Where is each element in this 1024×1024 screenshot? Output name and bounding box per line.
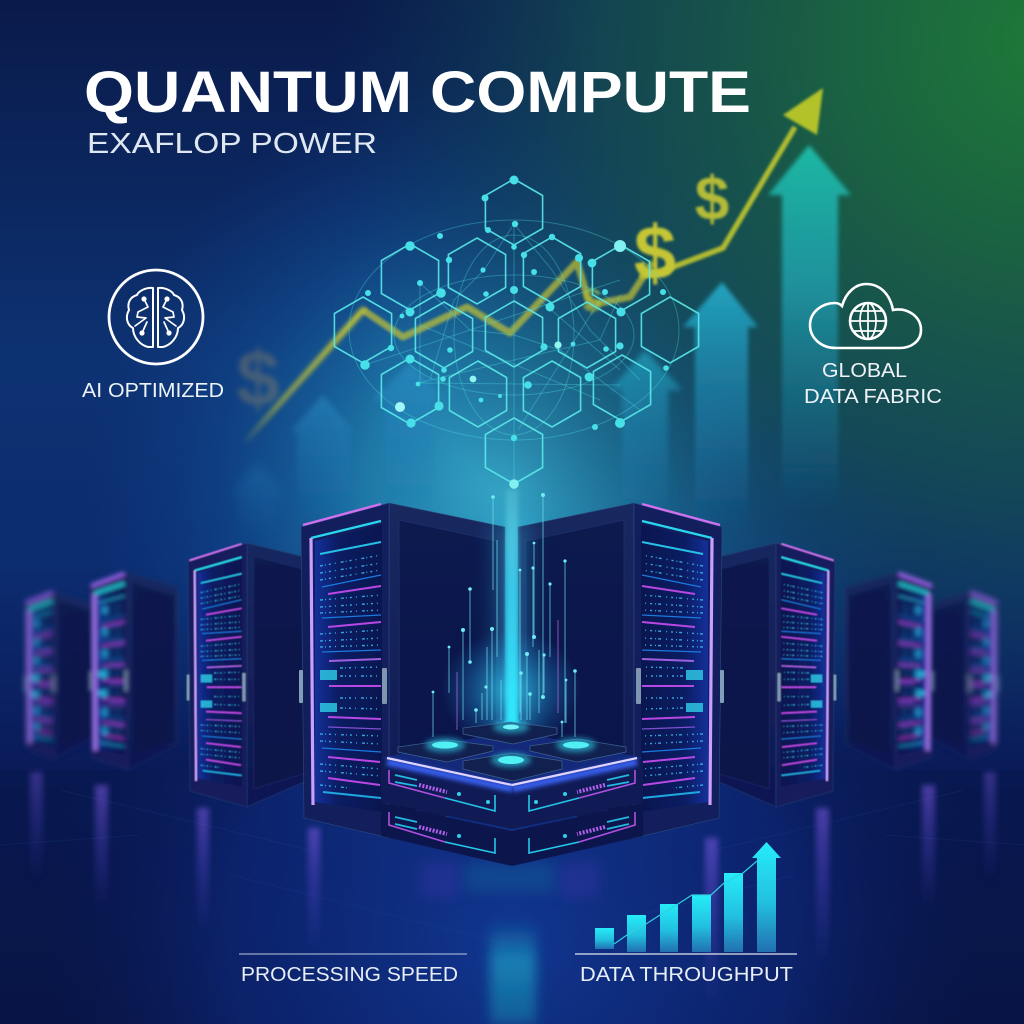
dollar signs: $ [695, 165, 729, 234]
bar chart: data throughput: DATA THROUGHPUT [580, 963, 793, 986]
icon: cloud and globe [810, 284, 921, 348]
rack row: left [24, 543, 325, 807]
light beam and data streams [432, 490, 581, 750]
title: QUANTUM COMPUTE [84, 60, 751, 125]
hexagon network [334, 176, 699, 490]
label: global data fabric: DATA FABRIC [804, 386, 942, 408]
dollar signs: $ [634, 211, 676, 296]
central platform [381, 721, 643, 866]
bar chart: data throughput [575, 842, 797, 986]
subtitle: EXAFLOP POWER [87, 128, 377, 160]
dollar signs: $ [236, 334, 280, 422]
label: processing speed: PROCESSING SPEED [241, 963, 458, 986]
label: global data fabric: GLOBAL [822, 360, 907, 382]
server rack: front left [299, 503, 505, 838]
label: global data fabric [804, 360, 942, 408]
dollar signs: $ [583, 282, 602, 320]
background growth arrows [230, 145, 851, 540]
rack row: right [698, 543, 999, 807]
icon: brain [109, 270, 203, 364]
label: AI optimized: AI OPTIMIZED [82, 380, 224, 402]
yellow growth line [247, 88, 823, 440]
floor [0, 770, 1024, 1024]
server rack: front right [518, 503, 724, 838]
processor chips [398, 721, 626, 781]
dollar signs [236, 165, 729, 422]
